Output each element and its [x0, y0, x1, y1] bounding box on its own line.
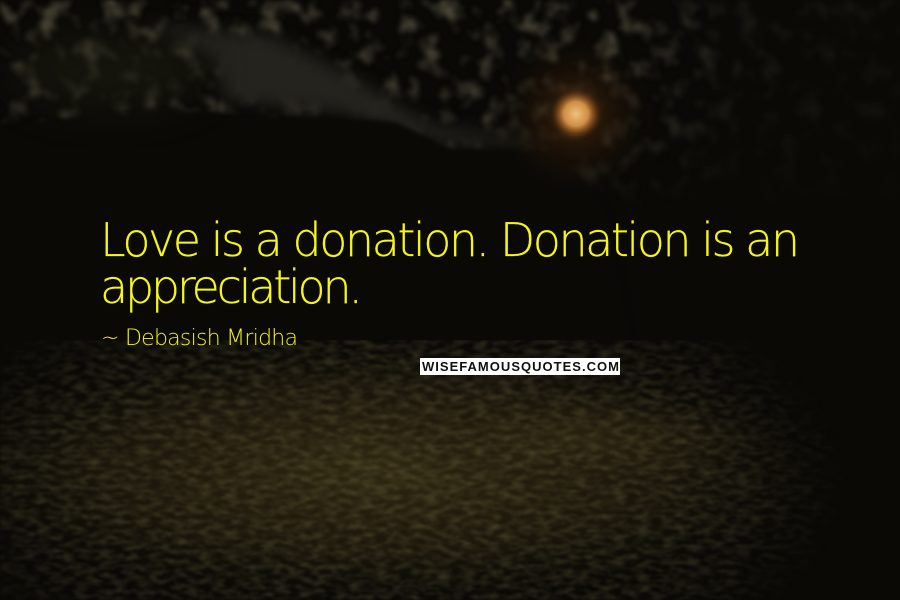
sky patch behind the trees — [150, 25, 545, 148]
dark house and hedge silhouette — [0, 110, 640, 380]
quote text — [100, 213, 800, 314]
sun glow — [496, 35, 656, 195]
author attribution: ~ Debasish Mridha — [101, 326, 298, 351]
quote line 1: Love is a donation. Donation is an — [100, 213, 800, 267]
quote line 2: appreciation. — [100, 260, 363, 314]
tree canopy foliage — [0, 0, 866, 181]
right tree shadow — [610, 0, 900, 220]
upper-left tree mass — [10, 32, 210, 108]
lit meadow grass — [0, 340, 900, 600]
watermark: wisefamousquotes.com: WISEFAMOUSQUOTES.COM — [422, 359, 619, 374]
